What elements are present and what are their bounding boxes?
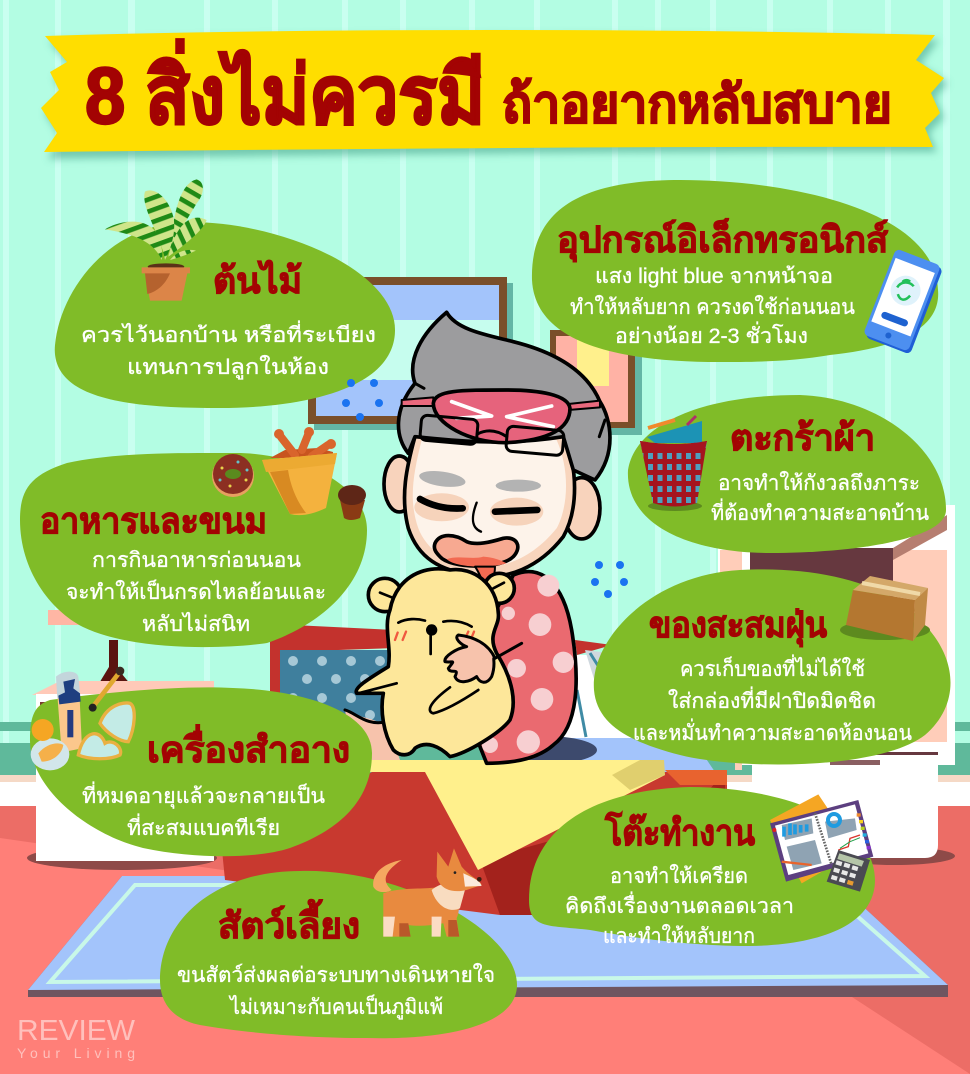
panel: pets: สัตว์เลี้ยง: [218, 899, 360, 946]
body text: ควรเก็บของที่ไม่ได้ใช้: [680, 654, 865, 681]
nose: [473, 503, 481, 532]
sleep mask: [402, 390, 600, 443]
body text: แสง light blue จากหน้าจอ: [595, 265, 833, 288]
body text: [177, 963, 495, 1020]
bed base: [222, 772, 727, 915]
body text: ใส่กล่องที่มีฝาปิดมิดชิด: [668, 686, 876, 713]
pillow: [280, 650, 394, 727]
panel: electronics: อุปกรณ์อิเล็กทรอนิกส์: [557, 217, 888, 263]
panel: laundry basket: ตะกร้าผ้า: [730, 417, 875, 458]
mattress: [493, 650, 735, 772]
icon: corgi dog: [373, 848, 482, 937]
skirting board: [0, 722, 970, 808]
body text: และทำให้หลับยาก: [603, 924, 755, 948]
body text: การกินอาหารก่อนนอน: [92, 549, 301, 572]
body text: และหมั่นทำความสะอาดห้องนอน: [633, 718, 912, 745]
icon: potted plant: [105, 179, 207, 301]
body text: ที่สะสมแบคทีเรีย: [127, 813, 280, 840]
body text: [565, 864, 794, 948]
panel: plants: [55, 179, 395, 408]
panel: dust collectors: [594, 569, 951, 765]
panel: pets: [160, 848, 517, 1038]
icon: laundry basket: [640, 416, 707, 511]
mouth: [434, 536, 518, 587]
panel: food and snacks: [20, 427, 367, 647]
body text: หลับไม่สนิท: [142, 612, 250, 636]
picture frame right: [550, 330, 642, 435]
title text: 8 สิ่งไม่ควรมี: [85, 39, 485, 140]
body text: ที่หมดอายุแล้วจะกลายเป็น: [82, 781, 325, 809]
body text: [81, 320, 376, 380]
body text: อย่างน้อย 2-3 ชั่วโมง: [615, 321, 808, 348]
floor: [0, 806, 970, 1074]
icon: muffin: [338, 485, 366, 520]
panel: plants: ต้นไม้: [213, 259, 302, 301]
ears: [384, 456, 600, 539]
side table left: [48, 610, 131, 685]
panel: cosmetics: [30, 667, 372, 856]
panel: food and snacks: อาหารและขนม: [40, 500, 267, 541]
cabinet left: [27, 681, 217, 870]
icon: planner and calculator: [770, 794, 873, 892]
title text: ถ้าอยากหลับสบาย: [502, 76, 892, 134]
character: grandma hugging bear: [345, 312, 610, 763]
legs: [345, 710, 400, 760]
body text: จะทำให้เป็นกรดไหลย้อนและ: [66, 578, 326, 604]
icon: fried chicken bucket: [262, 427, 337, 515]
panel: dust collectors: ของสะสมฝุ่น: [649, 604, 827, 648]
picture frame left: [308, 277, 513, 430]
body text: [570, 265, 855, 348]
headboard: [270, 625, 612, 765]
hand: [445, 635, 522, 682]
eyebrows: [418, 468, 541, 492]
body text: ที่ต้องทำความสะอาดบ้าน: [711, 498, 929, 525]
logo: Review Your Living: [17, 1015, 136, 1061]
body text: คิดถึงเรื่องงานตลอดเวลา: [565, 891, 794, 918]
hair: [398, 312, 610, 480]
head: [404, 437, 575, 577]
dress: [467, 572, 576, 763]
body text: [66, 549, 326, 636]
bed: [222, 625, 735, 915]
water drops left: [342, 379, 383, 421]
body text: อาจทำให้เครียด: [610, 864, 748, 888]
body text: แทนการปลูกในห้อง: [127, 355, 329, 380]
logo: Review Your Living: Your Living: [17, 1045, 135, 1061]
title banner: [41, 30, 948, 159]
logo: Review Your Living: REVIEW: [17, 1015, 136, 1047]
bear: [356, 569, 522, 757]
body text: [633, 654, 912, 745]
icon: smartphone: [862, 248, 944, 354]
body text: ไม่เหมาะกับคนเป็นภูมิแพ้: [228, 993, 443, 1020]
body text: [711, 471, 929, 525]
title text: [85, 39, 892, 140]
body text: ขนสัตว์ส่งผลต่อระบบทางเดินหายใจ: [177, 963, 495, 987]
blanket: [365, 760, 665, 870]
body text: อาจทำให้กังวลถึงภาระ: [718, 471, 920, 495]
panel: work desk: [529, 787, 875, 948]
panel: work desk: โต๊ะทำงาน: [604, 811, 755, 853]
glasses: [420, 415, 564, 456]
panel: electronics: [532, 180, 944, 362]
rug: [28, 876, 948, 997]
water drops right: [591, 561, 628, 598]
icon: donut: [212, 454, 254, 497]
cabinet right: [718, 505, 955, 865]
panel: cosmetics: เครื่องสำอาง: [147, 724, 350, 770]
panel: laundry basket: [628, 395, 946, 553]
body text: ควรไว้นอกบ้าน หรือที่ระเบียง: [81, 320, 376, 347]
body text: ทำให้หลับยาก ควรงดใช้ก่อนนอน: [570, 295, 855, 319]
icon: cardboard box: [840, 576, 930, 641]
eyes: [414, 493, 543, 526]
body text: [82, 781, 325, 840]
icon: cosmetics set: [31, 667, 134, 770]
